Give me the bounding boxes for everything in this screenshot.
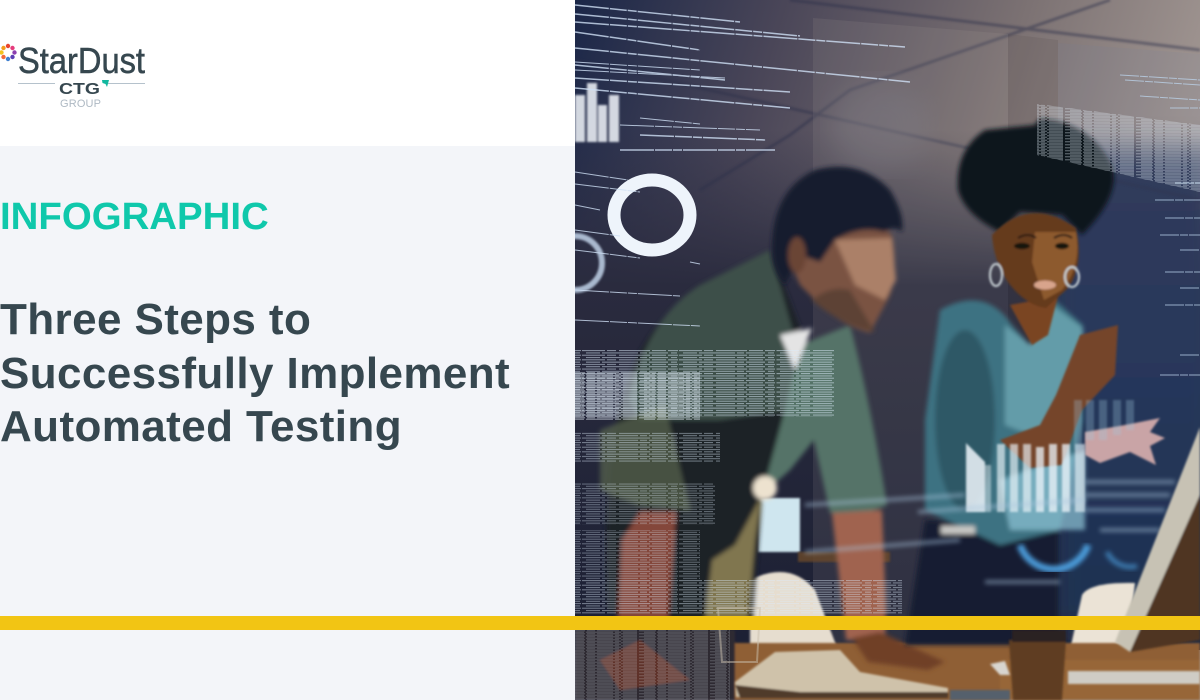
woman: arm and hands [1000,325,1165,468]
hologram: code lines top left [575,5,910,326]
woman: hair [958,118,1114,235]
icon: CTG arrow [102,80,109,87]
hologram: small bar chart [575,83,619,142]
logo divider lines [18,82,145,84]
kicker: INFOGRAPHIC: INFOGRAPHIC [0,195,269,238]
coffee cup [1009,630,1066,700]
photo panel: two colleagues viewing holographic code [575,0,1200,700]
hologram: white donut chart [548,180,690,290]
woman: face [990,213,1079,345]
man: head [772,167,902,333]
man: shirt and arms [600,250,945,670]
desk [575,630,1200,700]
hologram: dense code block top right [1037,104,1200,192]
hologram: blue rings [1020,545,1137,569]
left text panel [0,146,575,700]
background: office ceiling [575,0,1200,700]
main title: Successfully Implement [0,348,510,398]
logo GROUP: GROUP [60,98,101,110]
hologram: code lines right [1120,75,1200,375]
background chair, shelf and monitor [750,498,1135,650]
keyboard [950,661,1200,700]
woman: blouse and jeans [905,300,1085,645]
logo: StarDust CTG Group [0,40,145,110]
main title [0,295,510,451]
hologram: dense code block over man [575,350,902,700]
hologram: bar chart over woman [966,400,1130,512]
header panel [0,0,575,146]
main title: Automated Testing [0,402,402,451]
main title: Three Steps to [0,295,311,344]
translucent glass panels [813,18,1200,650]
yellow accent bar [0,616,1200,630]
desktop monitor [1115,427,1200,652]
logo CTG: CTG [59,81,100,98]
icon: colored dot ring [0,44,17,61]
notebook [735,650,948,698]
water glass [718,608,760,662]
hologram: blurred data rows [805,482,1175,582]
